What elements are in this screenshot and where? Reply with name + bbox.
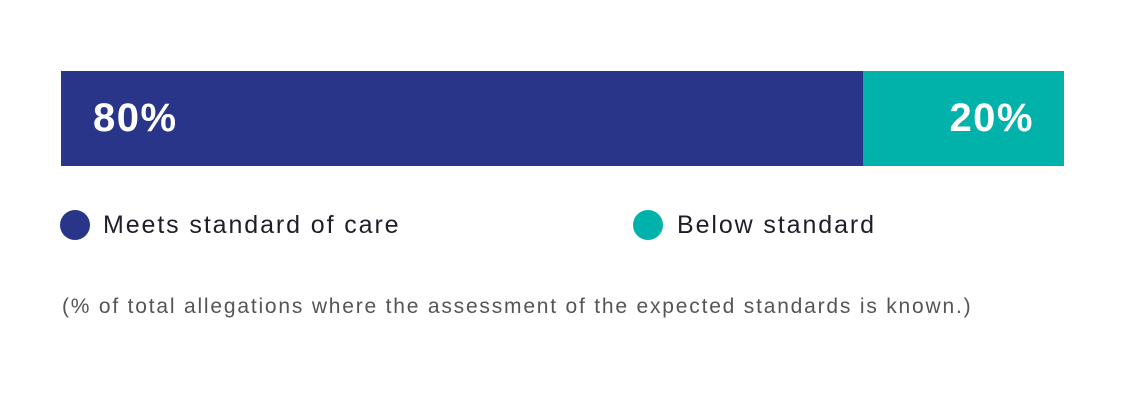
stacked bar chart bbox=[61, 71, 1064, 166]
legend: meets standard of care bbox=[60, 210, 400, 240]
label: 20%: 20% bbox=[949, 96, 1034, 140]
bar segment: meets standard 80% bbox=[61, 71, 863, 166]
icon: navy dot bbox=[60, 210, 90, 240]
legend text: Below standard bbox=[677, 211, 876, 239]
label: 80%: 80% bbox=[93, 96, 178, 140]
footnote: (% of total allegations where the assessment of the expected standards is known.) bbox=[62, 295, 972, 318]
legend: below standard bbox=[633, 210, 876, 240]
legend text: Meets standard of care bbox=[103, 211, 400, 239]
icon: teal dot bbox=[633, 210, 663, 240]
bar segment: below standard 20% bbox=[863, 71, 1064, 166]
